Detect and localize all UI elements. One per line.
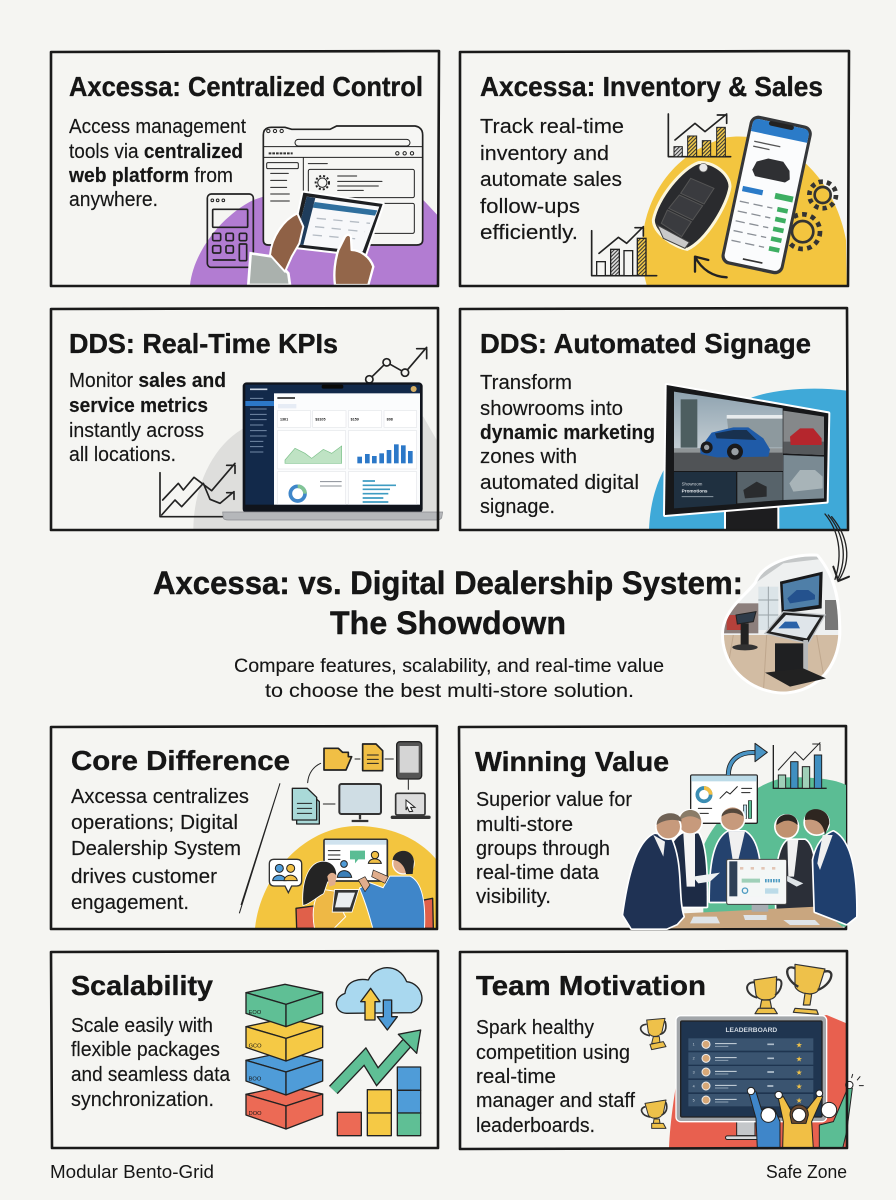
body text bbox=[480, 371, 655, 518]
illustration: digital signage display bbox=[649, 385, 847, 530]
illustration: leaderboard monitor, trophies, cheering team: 5 bbox=[693, 1098, 695, 1102]
body text: follow-ups bbox=[480, 195, 580, 218]
heading: DDS: Automated Signage bbox=[480, 328, 811, 359]
body text: Scale easily with bbox=[71, 1014, 213, 1037]
panel: Winning Value bbox=[459, 726, 856, 929]
body text: drives customer bbox=[71, 865, 217, 888]
subtitle bbox=[234, 655, 664, 702]
module: green bbox=[246, 984, 323, 1027]
illustration: leaderboard monitor, trophies, cheering team: ★ bbox=[796, 1040, 802, 1049]
illustration: team around dashboard bbox=[623, 743, 856, 928]
body text bbox=[480, 115, 624, 244]
body text: operations; Digital bbox=[71, 811, 238, 834]
body text: real-time bbox=[476, 1065, 556, 1088]
body text: all locations. bbox=[69, 443, 176, 466]
module: blue bbox=[246, 1052, 323, 1095]
footer label: Safe Zone: Safe Zone bbox=[766, 1162, 847, 1182]
trophy: small lower bbox=[642, 1100, 667, 1128]
body text: automated digital bbox=[480, 471, 639, 494]
body text: flexible packages bbox=[71, 1038, 220, 1061]
illustration: laptop dashboard: $3105 bbox=[315, 418, 326, 422]
body text: Spark healthy bbox=[476, 1016, 595, 1039]
body text: inventory and bbox=[480, 142, 609, 165]
module: red bbox=[246, 1086, 323, 1129]
panel: Axcessa Inventory and Sales bbox=[460, 51, 849, 286]
illustration: stacked modules, cloud, growth bbox=[246, 968, 422, 1136]
illustration: leaderboard monitor, trophies, cheering team: LEADERBOARD bbox=[725, 1027, 777, 1034]
body text: competition using bbox=[476, 1041, 630, 1064]
illustration: laptop dashboard: $159 bbox=[351, 418, 359, 422]
body text: service metrics bbox=[69, 394, 208, 417]
illustration: stacked modules, cloud, growth: GCO bbox=[249, 1044, 262, 1050]
panel: Core Difference bbox=[51, 726, 437, 929]
body text bbox=[476, 788, 632, 908]
illustration: stacked modules, cloud, growth: BOO bbox=[249, 1077, 262, 1083]
illustration: leaderboard monitor, trophies, cheering team: 4 bbox=[693, 1084, 695, 1088]
body text: Axcessa centralizes bbox=[71, 785, 249, 808]
body text: visibility. bbox=[476, 885, 551, 908]
title bbox=[153, 565, 743, 641]
title: Axcessa: vs. Digital Dealership System: bbox=[153, 565, 743, 601]
illustration: leaderboard monitor, trophies, cheering team: 1 bbox=[693, 1043, 695, 1047]
body text: Track real-time bbox=[480, 115, 624, 138]
person: green bbox=[819, 1081, 853, 1148]
body text: synchronization. bbox=[71, 1088, 214, 1111]
illustration: collaboration and devices bbox=[239, 742, 437, 928]
body text: tools via centralized bbox=[69, 140, 243, 163]
body text bbox=[68, 115, 246, 211]
body text: signage. bbox=[480, 495, 555, 518]
body text bbox=[476, 1016, 635, 1137]
illustration: key fob, phone, charts bbox=[592, 114, 847, 285]
heading: Scalability bbox=[71, 970, 213, 1001]
body text: manager and staff bbox=[476, 1089, 635, 1112]
heading: Axcessa: Centralized Control bbox=[69, 71, 423, 102]
illustration: digital signage display: Promotions bbox=[682, 489, 708, 494]
heading: Core Difference bbox=[71, 745, 290, 776]
body text: Monitor sales and bbox=[69, 369, 226, 392]
illustration: laptop dashboard bbox=[160, 347, 443, 530]
illustration: laptop dashboard: 1361 bbox=[280, 418, 288, 422]
illustration: leaderboard monitor, trophies, cheering team bbox=[641, 964, 863, 1148]
body text: Dealership System bbox=[71, 837, 241, 860]
illustration: leaderboard monitor, trophies, cheering team: ★ bbox=[796, 1054, 802, 1063]
person: blue bbox=[747, 1087, 780, 1148]
heading: DDS: Real-Time KPIs bbox=[69, 328, 338, 359]
heading: Axcessa: Inventory & Sales bbox=[480, 71, 823, 102]
arrow: signage to kiosk bbox=[825, 514, 849, 581]
panel: DDS Automated Signage bbox=[460, 308, 848, 530]
panel: DDS Real-Time KPIs bbox=[51, 308, 443, 530]
body text: Superior value for bbox=[476, 788, 632, 811]
body text: web platform from bbox=[68, 164, 233, 187]
illustration: stacked modules, cloud, growth: DOO bbox=[249, 1111, 262, 1117]
title: The Showdown bbox=[330, 605, 566, 641]
body text: multi-store bbox=[476, 813, 573, 836]
illustration: digital signage display: Showroom bbox=[682, 481, 703, 486]
illustration: web platform and tablet bbox=[190, 126, 437, 285]
heading: Winning Value bbox=[475, 746, 669, 777]
body text: zones with bbox=[480, 445, 577, 468]
illustration: leaderboard monitor, trophies, cheering team: 2 bbox=[693, 1057, 695, 1061]
body text: dynamic marketing bbox=[480, 421, 655, 444]
body text: groups through bbox=[476, 837, 610, 860]
body text: instantly across bbox=[69, 419, 204, 442]
body text: Access management bbox=[69, 115, 246, 138]
trophy: large bbox=[787, 964, 831, 1014]
body text: real-time data bbox=[476, 861, 600, 884]
illustration: stacked modules, cloud, growth: EOO bbox=[249, 1010, 262, 1016]
illustration: leaderboard monitor, trophies, cheering team: 3 bbox=[693, 1070, 695, 1074]
trophy: small upper bbox=[641, 1018, 666, 1050]
body text: automate sales bbox=[480, 168, 622, 191]
heading: Team Motivation bbox=[476, 970, 706, 1001]
illustration: leaderboard monitor, trophies, cheering team: ★ bbox=[796, 1096, 802, 1105]
trophy: medium bbox=[747, 977, 781, 1014]
body text: showrooms into bbox=[480, 397, 623, 420]
body text: and seamless data bbox=[71, 1063, 231, 1086]
panel: Team Motivation bbox=[460, 951, 863, 1149]
illustration: laptop dashboard: 808 bbox=[387, 418, 393, 422]
subtitle: to choose the best multi-store solution. bbox=[265, 680, 634, 702]
body text bbox=[71, 1014, 231, 1111]
illustration: leaderboard monitor, trophies, cheering team: ★ bbox=[796, 1068, 802, 1077]
panel: Scalability bbox=[51, 951, 438, 1148]
illustration: showroom kiosk bbox=[722, 553, 842, 693]
subtitle: Compare features, scalability, and real-time value bbox=[234, 655, 664, 677]
body text: Transform bbox=[480, 371, 572, 394]
body text bbox=[69, 369, 226, 466]
panel: Axcessa Centralized Control bbox=[51, 51, 439, 286]
footer label: Modular Bento-Grid: Modular Bento-Grid bbox=[50, 1162, 214, 1182]
illustration: leaderboard monitor, trophies, cheering team: ★ bbox=[796, 1082, 802, 1091]
body text: anywhere. bbox=[69, 188, 158, 211]
body text bbox=[71, 785, 249, 914]
body text: leaderboards. bbox=[476, 1114, 595, 1137]
body text: engagement. bbox=[71, 891, 189, 914]
module: yellow bbox=[246, 1018, 323, 1061]
body text: efficiently. bbox=[480, 221, 578, 244]
person: yellow bbox=[775, 1090, 823, 1148]
